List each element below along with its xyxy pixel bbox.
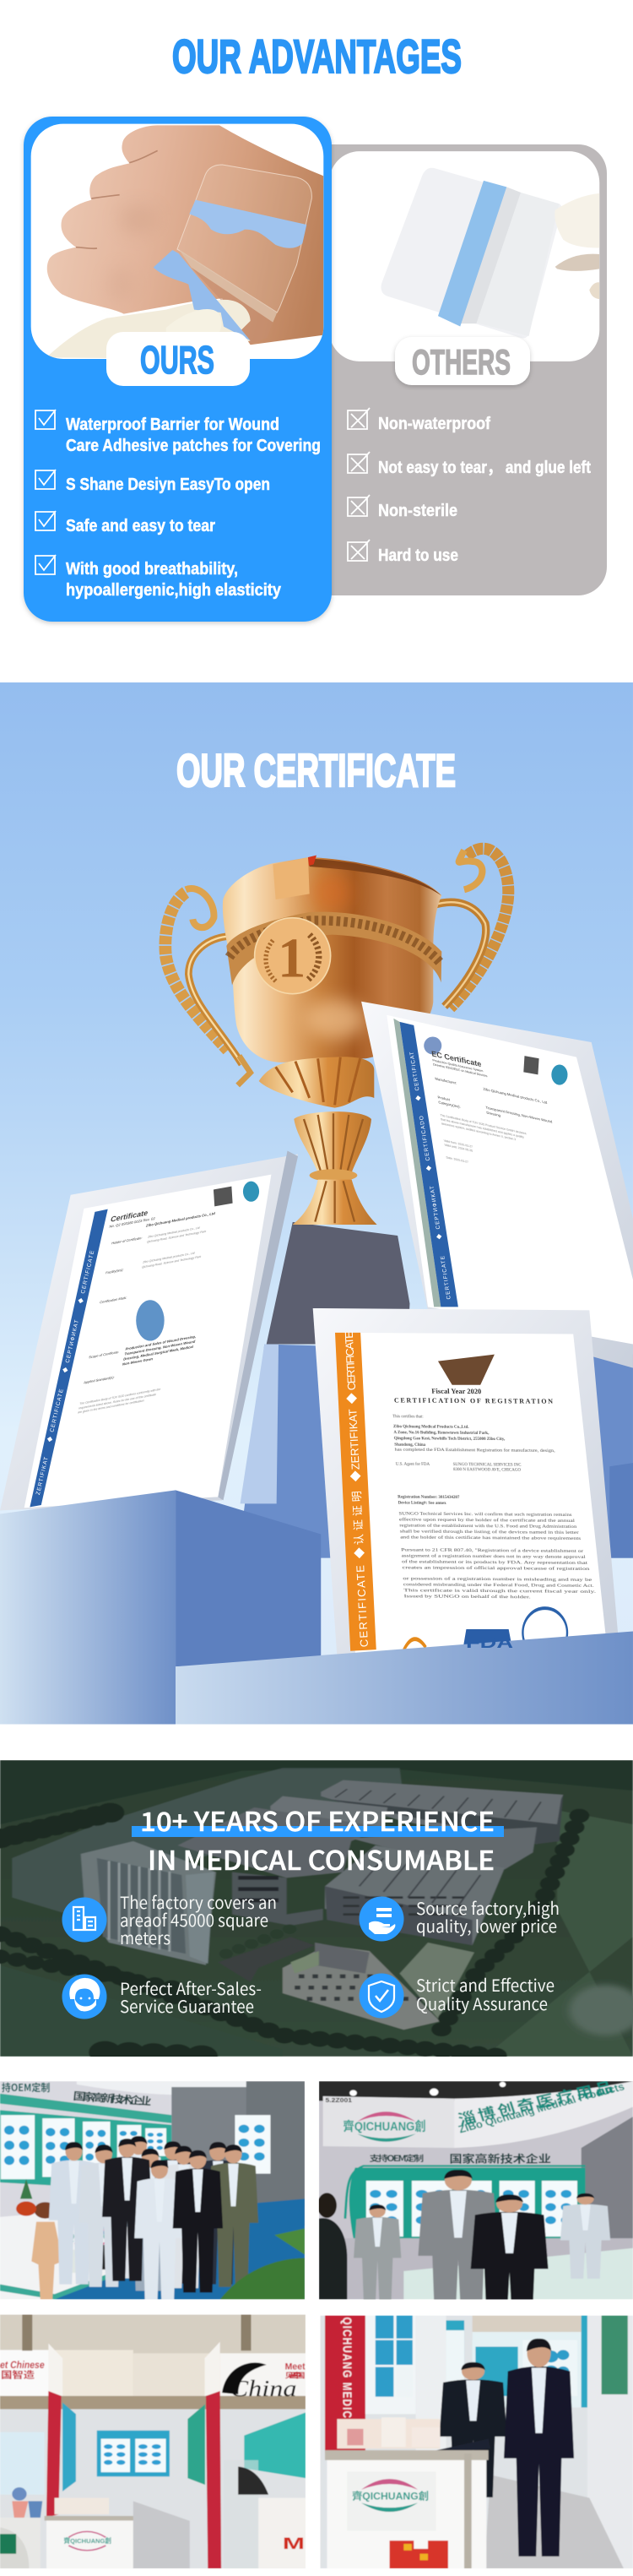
feature: quality assurance: Strict and Effective — [416, 1972, 555, 1997]
others pill label — [395, 337, 530, 385]
right certificate text: Directive 93/42/EEC on Medical Devices — [433, 1062, 488, 1078]
ours list: Care Adhesive patches for Covering — [66, 437, 321, 455]
left certificate stripe text: СЕРТИФИКАТ — [65, 1318, 80, 1363]
right certificate stripe text: ◆ — [425, 1164, 433, 1171]
front certificate text: creates an impression of official approval because of registration — [402, 1566, 591, 1572]
front certificate stripe text: ◆ — [345, 1393, 359, 1405]
photo: team at booth: QICHUANG — [68, 2231, 109, 2242]
certificate title: OUR CERTIFICATE — [176, 744, 456, 796]
front certificate text — [391, 1386, 597, 1600]
left certificate text: Applied Standard(s): — [84, 1375, 115, 1384]
title: our advantages: OUR ADVANTAGES — [172, 30, 462, 83]
right certificate text: assurance system, audited according to Annex II, section 3 — [441, 1122, 516, 1141]
left certificate frame — [0, 1151, 298, 1510]
FDA logo text: FDA — [466, 1634, 513, 1651]
exhibition photos — [0, 2075, 633, 2568]
foreground blocks — [0, 1490, 633, 1725]
right certificate text: Dressing — [486, 1111, 501, 1117]
left certificate stripe text: ◆ — [46, 1435, 54, 1443]
panel: ours comparison — [24, 117, 332, 622]
right certificate text: Product — [437, 1095, 451, 1102]
right certificate text: Manufacturer: — [435, 1076, 457, 1085]
photo: trade fair stand: et Chinese — [0, 2359, 45, 2370]
right certificate stripe text: CERTIFICATE — [440, 1254, 452, 1300]
feature: quality assurance: Quality Assurance — [416, 1991, 548, 2015]
others list: Hard to use — [378, 546, 458, 565]
photo: trade fair stand: 齊QICHUANG創 — [64, 2536, 111, 2545]
front certificate text: U.S. Agent for FDA — [396, 1462, 430, 1467]
left certificate text — [72, 1195, 225, 1416]
right certificate stripe text: ◆ — [414, 1094, 422, 1101]
feature: after-sales — [62, 1975, 262, 2019]
product photo: patch on hand — [31, 124, 323, 359]
left certificate text: Qichuang Road, Science and Technology Park — [142, 1255, 202, 1269]
front certificate stripe text — [340, 1330, 371, 1648]
photo: two people at QICHUANG booth: 5.2Z001 — [326, 2097, 353, 2104]
photo: two people at QICHUANG booth — [319, 2081, 633, 2299]
feature: source factory: Source factory,high — [416, 1895, 560, 1920]
left certificate text: Production and Sales of Wound Dressing, — [125, 1334, 197, 1351]
photo: trade fair stand: 国智造 — [1, 2367, 35, 2381]
trophy — [165, 849, 508, 1225]
ours list: With good breathability, — [66, 560, 238, 579]
photo: two people at QICHUANG booth: 支持OEM定制 — [370, 2152, 424, 2165]
left certificate stripe text — [35, 1249, 95, 1496]
trophy stem — [259, 1057, 374, 1108]
ours list — [35, 410, 321, 600]
feature: source factory: quality, lower price — [416, 1913, 557, 1937]
right certificate frame — [361, 1002, 633, 1368]
front certificate text: SUNGO Technical Services Inc. will confirm that such registration remains — [398, 1512, 572, 1518]
left certificate text: Certificate — [110, 1209, 149, 1224]
front certificate stripe text: ◆ — [353, 1547, 366, 1559]
ours list: Safe and easy to tear — [66, 517, 215, 535]
front certificate text: A Zone, No.16 Building, Renewtown Industrial Park, — [393, 1431, 490, 1436]
right certificate text: Zibo Qichuang Medical products Co., Ltd — [483, 1087, 548, 1105]
others list — [348, 408, 591, 565]
heading — [140, 1801, 495, 1878]
photo: two people at QICHUANG booth: 淄博创奇医疗用品 — [455, 2075, 615, 2129]
photo: two people with logo counter — [320, 2316, 633, 2568]
panel: factory experience — [0, 1760, 633, 2057]
right certificate stripe text: СЕРТИФИКАТ — [429, 1185, 441, 1230]
others list: Non-sterile — [378, 502, 457, 520]
feature: factory area: The factory covers an — [120, 1889, 277, 1914]
photo: trade fair stand: Meet — [285, 2361, 306, 2372]
front certificate text: Fiscal Year 2020 — [431, 1387, 482, 1395]
front certificate text: Pursuant to 21 CFR 807.40, "Registration of a device establishment or — [401, 1548, 584, 1554]
trophy cup — [223, 857, 441, 1062]
right certificate stripe text — [408, 1051, 452, 1300]
front certificate stripe text: ◆ — [349, 1470, 362, 1482]
right certificate text — [431, 1049, 561, 1184]
left certificate text: Qichuang Road, Science and Technology Park — [147, 1230, 207, 1244]
feature: quality assurance — [360, 1972, 555, 2019]
photo: two people with logo counter: 齊QICHUANG創 — [352, 2491, 429, 2502]
left certificate text: Certification Mark: — [100, 1296, 127, 1304]
heading: IN MEDICAL CONSUMABLE — [148, 1840, 495, 1878]
ours pill label: OURS — [140, 338, 214, 382]
ours list: Waterproof Barrier for Wound — [66, 416, 279, 434]
left certificate text: No. Q2 093380 0023 Rev. 02 — [109, 1216, 156, 1229]
ours list: hypoallergenic,high elasticity — [66, 581, 282, 600]
product photo: others dressing — [329, 151, 599, 361]
front certificate text: has completed the FDA Establishment Registration for manufacture, design, — [395, 1448, 555, 1454]
left certificate text: Non-Woven Gown — [122, 1356, 154, 1367]
photo: team at booth: 持OEM定制 — [2, 2079, 50, 2094]
photo: trade fair stand: M — [283, 2534, 305, 2552]
right certificate text: Production Quality Assurance System — [432, 1058, 484, 1073]
others list: Non-waterproof — [378, 415, 490, 433]
photo: two people with logo counter: QICHUANG MEDICAL — [340, 2317, 354, 2434]
right certificate text: Transparent Dressing, Non-Woven Wound — [485, 1106, 553, 1124]
feature: factory area: meters — [120, 1925, 170, 1949]
others list: Not easy to tear， and glue left — [378, 459, 591, 477]
feature: source factory — [360, 1895, 560, 1941]
front certificate text: or possession of a registration number is misleading and may be — [403, 1577, 593, 1583]
front certificate stripe text: 认证证明 — [348, 1491, 366, 1546]
icon: support headset — [62, 1975, 106, 2019]
front certificate text: Qingdong Gao Kesi, Newhills Tech District, 255000 Zibo City, — [394, 1437, 506, 1442]
front certificate text: considered misbranding under the Federal Food, Drug and Cosmetic Act. — [403, 1583, 594, 1589]
right certificate text: Date: 2020-03-27 — [446, 1155, 468, 1164]
photo: trade fair stand — [0, 2314, 306, 2568]
icon: shield check — [360, 1973, 403, 2019]
ours pill label — [106, 332, 250, 386]
left certificate stripe text: CERTIFICATE — [80, 1249, 95, 1294]
front certificate text: assignment of a registration number does not in any way denote approval — [402, 1554, 587, 1560]
left certificate text: Dressing, Medical Surgical Mask, Medical — [123, 1345, 193, 1361]
left certificate text: Zibo Qichuang Medical products Co., Ltd — [148, 1226, 200, 1239]
left certificate text: Zibo Qichuang Medical products Co., Ltd — [146, 1211, 216, 1228]
left certificate text: The Certification Body of TÜV SÜD confirms conformity with the — [79, 1388, 161, 1405]
photo: two people at QICHUANG booth: 齊QICHUANG創 — [344, 2118, 426, 2133]
front certificate text: registration of the establishment with the U.S. Food and Drug Administration — [399, 1524, 577, 1530]
front certificate text: and the holder of this certificate has maintained the above requirements — [400, 1535, 581, 1541]
panel: others comparison — [304, 144, 607, 595]
others pill label: OTHERS — [412, 342, 511, 382]
sky and pedestals — [0, 682, 633, 1725]
heading: 10+ YEARS OF EXPERIENCE — [140, 1801, 495, 1839]
ours list: S Shane Desiyn EasyTo open — [66, 476, 270, 494]
feature: after-sales: Perfect After-Sales- — [120, 1975, 262, 2000]
front certificate text: 8300 N EASTWOOD AVE, CHICAGO — [453, 1468, 522, 1472]
photo: two people at QICHUANG booth: 国家高新技术企业 — [449, 2151, 551, 2166]
photo: trade fair stand: 见证中国 — [285, 2370, 306, 2380]
front certificate text: effective upon request by the holder of the certificate and the annual — [399, 1518, 576, 1524]
right certificate stripe text: CERTIFICAT — [409, 1051, 421, 1091]
front certificate text: of the establishment or its products by FDA. Any representation that — [402, 1560, 588, 1566]
front certificate frame — [313, 1308, 619, 1657]
front certificate text: Issued by SUNGO on behalf of the holder. — [404, 1595, 531, 1600]
right certificate text: EC Certificate — [431, 1049, 482, 1068]
front certificate stripe text: CERTIFICATE — [343, 1331, 358, 1391]
photo: team at booth — [0, 2079, 305, 2302]
right certificate stripe text: CERTIFICADO — [419, 1115, 431, 1161]
photo: trade fair stand: China — [230, 2376, 297, 2401]
right certificate stripe text: ◆ — [436, 1232, 443, 1240]
left certificate text: Facility(ies): — [106, 1268, 124, 1274]
left certificate text: Transparent Dressing, Non-Woven Wound — [124, 1340, 196, 1356]
trophy handles — [165, 849, 508, 1085]
front certificate text: Shandong, China — [394, 1443, 426, 1448]
aerial factory background — [0, 1760, 633, 2057]
front certificate text: CERTIFICATION OF REGISTRATION — [394, 1396, 554, 1405]
right certificate text: that the above manufacturer has established and applies a quality — [441, 1117, 524, 1139]
certificate frames and blocks — [0, 1002, 633, 1725]
left certificate text: are given in the terms and conditions for certification — [78, 1399, 144, 1414]
left certificate text: requirements listed above. Rules for the use of this certificate — [78, 1393, 156, 1410]
icon: hand with coins — [360, 1897, 403, 1941]
front certificate stripe text: ZERTIFIKAT — [346, 1409, 362, 1470]
heading highlight bar — [132, 1826, 504, 1837]
left certificate stripe text: CERTIFICATE — [49, 1388, 65, 1432]
front certificate text: This certifies that: — [392, 1415, 424, 1420]
right certificate text: Valid from: 2020-03-27 — [443, 1139, 473, 1149]
left certificate stripe text: ZERTIFIKAT — [35, 1456, 50, 1496]
right certificate text: Valid until: 2024-05-26 — [444, 1143, 473, 1153]
icon: buildings — [62, 1897, 106, 1943]
front certificate text: Zibo Qichuang Medical Products Co.,Ltd. — [393, 1425, 470, 1430]
front certificate text: shall be verified through the listing of the devices named in this letter — [400, 1530, 579, 1535]
front certificate text: Registration Number: 3015434207 — [398, 1495, 460, 1500]
photo: team at booth: 国家高新技术企业 — [73, 2089, 153, 2109]
front certificate text: SUNGO TECHNICAL SERVICES INC — [453, 1463, 522, 1467]
left certificate text: Scope of Certificate: — [89, 1350, 120, 1359]
left certificate text: Holder of Certificate: — [111, 1236, 143, 1245]
panel: our certificate scene — [0, 682, 633, 1725]
feature: factory area: areaof 45000 square — [120, 1907, 268, 1932]
right certificate text: Category(ies): — [438, 1100, 461, 1109]
feature: after-sales: Service Guarantee — [120, 1993, 254, 2018]
left certificate stripe text: ◆ — [77, 1296, 85, 1304]
feature: factory area — [62, 1889, 277, 1949]
right certificate text: The Certification Body of TÜV SÜD Product Service GmbH declares — [440, 1113, 527, 1135]
left certificate stripe text: ◆ — [62, 1366, 70, 1373]
front certificate stripe text: CERTIFICATE — [354, 1565, 371, 1648]
front certificate text: Device Listing#: See annex — [398, 1501, 446, 1506]
trophy: 1 — [278, 928, 306, 990]
left certificate text: Zibo Qichuang Medical products Co., Ltd — [143, 1252, 195, 1264]
front certificate text: This certificate is valid through the current fiscal year only. — [403, 1589, 596, 1595]
